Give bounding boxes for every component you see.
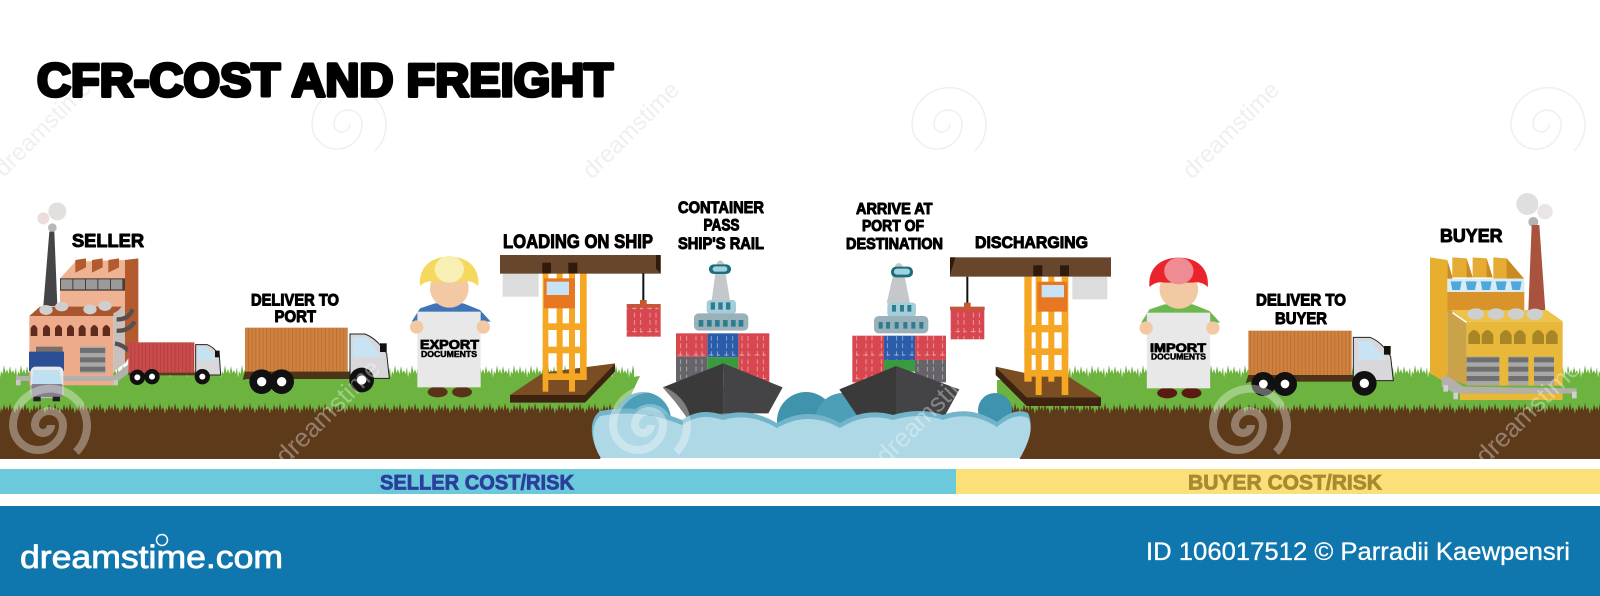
label: deliver to buyer: BUYER (1275, 310, 1327, 328)
back building (1430, 257, 1524, 383)
chimney (43, 232, 57, 306)
pipes (115, 309, 135, 351)
buyer land: grass and soil (997, 364, 1600, 459)
watermark: upper spirals and text: dreamstime (1177, 76, 1285, 184)
label: container pass ship's rail: SHIP'S RAIL (678, 235, 764, 253)
watermark: lower spirals and text (13, 353, 1586, 470)
label: discharging: DISCHARGING (975, 233, 1088, 252)
footer band (0, 506, 1600, 596)
label: import documents (1150, 341, 1207, 362)
label: seller: SELLER (72, 230, 144, 251)
loading platform (1442, 377, 1577, 400)
red truck (128, 342, 221, 385)
watermark: lower spirals and text: dreamstime (869, 353, 986, 470)
hanging container (950, 277, 985, 339)
front building (1447, 308, 1563, 386)
grey counterweight (503, 273, 539, 297)
label: import documents: DOCUMENTS (1151, 352, 1207, 362)
label: export documents (420, 338, 479, 359)
ship hull (663, 363, 783, 421)
watermark: upper spirals and text (0, 74, 1585, 184)
label: export documents: EXPORT (420, 338, 479, 352)
label: container pass ship's rail: PASS (704, 216, 740, 234)
crane: discharging (950, 257, 1111, 406)
crane beam (500, 255, 661, 274)
factory: buyer (1430, 193, 1577, 400)
ship: arrive at port of destination (839, 263, 959, 422)
label: container pass ship's rail: CONTAINER (678, 199, 764, 217)
orange truck: deliver to port (243, 328, 389, 394)
crane tower (1024, 277, 1068, 395)
crane beam (950, 257, 1111, 277)
label: deliver to buyer (1256, 292, 1346, 328)
smoke (37, 202, 66, 232)
label: deliver to port: PORT (274, 308, 316, 326)
grey counterweight (1072, 277, 1107, 299)
ship containers (852, 336, 946, 382)
back waves (615, 392, 1012, 450)
seller land: grass and soil (0, 364, 640, 459)
lower building (29, 301, 125, 385)
label: container pass ship's rail (678, 199, 764, 253)
cost bar: seller: SELLER COST/RISK (380, 472, 574, 494)
hanging container (627, 273, 661, 337)
orange truck: deliver to buyer (1246, 331, 1393, 396)
loading platform (16, 364, 128, 385)
footer credit: ID 106017512 © Parradii Kaewpensri (1146, 538, 1570, 566)
label: import documents: IMPORT (1150, 341, 1207, 355)
ship hull (839, 366, 959, 422)
label: loading on ship: LOADING ON SHIP (503, 231, 653, 253)
watermark: lower spirals and text: dreamstime (1469, 353, 1586, 470)
label: arrive at port of destination: ARRIVE AT (856, 201, 933, 218)
ship tower (694, 260, 748, 331)
label: arrive at port of destination (846, 201, 943, 253)
crane: loading on ship (500, 255, 661, 403)
label: export documents: DOCUMENTS (421, 350, 478, 359)
label: deliver to port: DELIVER TO (251, 292, 339, 310)
crane cab (1037, 282, 1067, 312)
worker: export documents (410, 256, 491, 397)
crane tower (543, 273, 587, 392)
water (592, 408, 1031, 458)
label: deliver to port (251, 292, 339, 326)
ship tower (874, 263, 928, 333)
blue truck front (29, 352, 64, 401)
crane cab (544, 278, 575, 308)
watermark: upper spirals and text: dreamstime (577, 76, 685, 184)
crane base (996, 367, 1101, 406)
footer logo: dreamstime.com (20, 539, 283, 575)
factory: seller (16, 202, 221, 401)
cost bar: buyer (956, 469, 1600, 494)
label: buyer: BUYER (1440, 225, 1502, 246)
worker: import documents (1139, 258, 1220, 398)
ship: container pass ship's rail (663, 260, 783, 421)
labels (72, 199, 1502, 362)
upper building (60, 258, 138, 363)
cost bar: seller (0, 469, 956, 494)
watermark: lower spirals and text: dreamstime (269, 353, 386, 470)
label: arrive at port of destination: PORT OF (862, 218, 924, 235)
cost bar: buyer: BUYER COST/RISK (1188, 472, 1382, 494)
title: CFR-COST AND FREIGHT (37, 54, 613, 106)
smoke (1516, 193, 1553, 227)
crane base (510, 363, 615, 403)
ship containers (676, 333, 769, 382)
chimney (1528, 225, 1545, 311)
label: deliver to buyer: DELIVER TO (1256, 292, 1346, 310)
label: arrive at port of destination: DESTINATION (846, 236, 943, 253)
